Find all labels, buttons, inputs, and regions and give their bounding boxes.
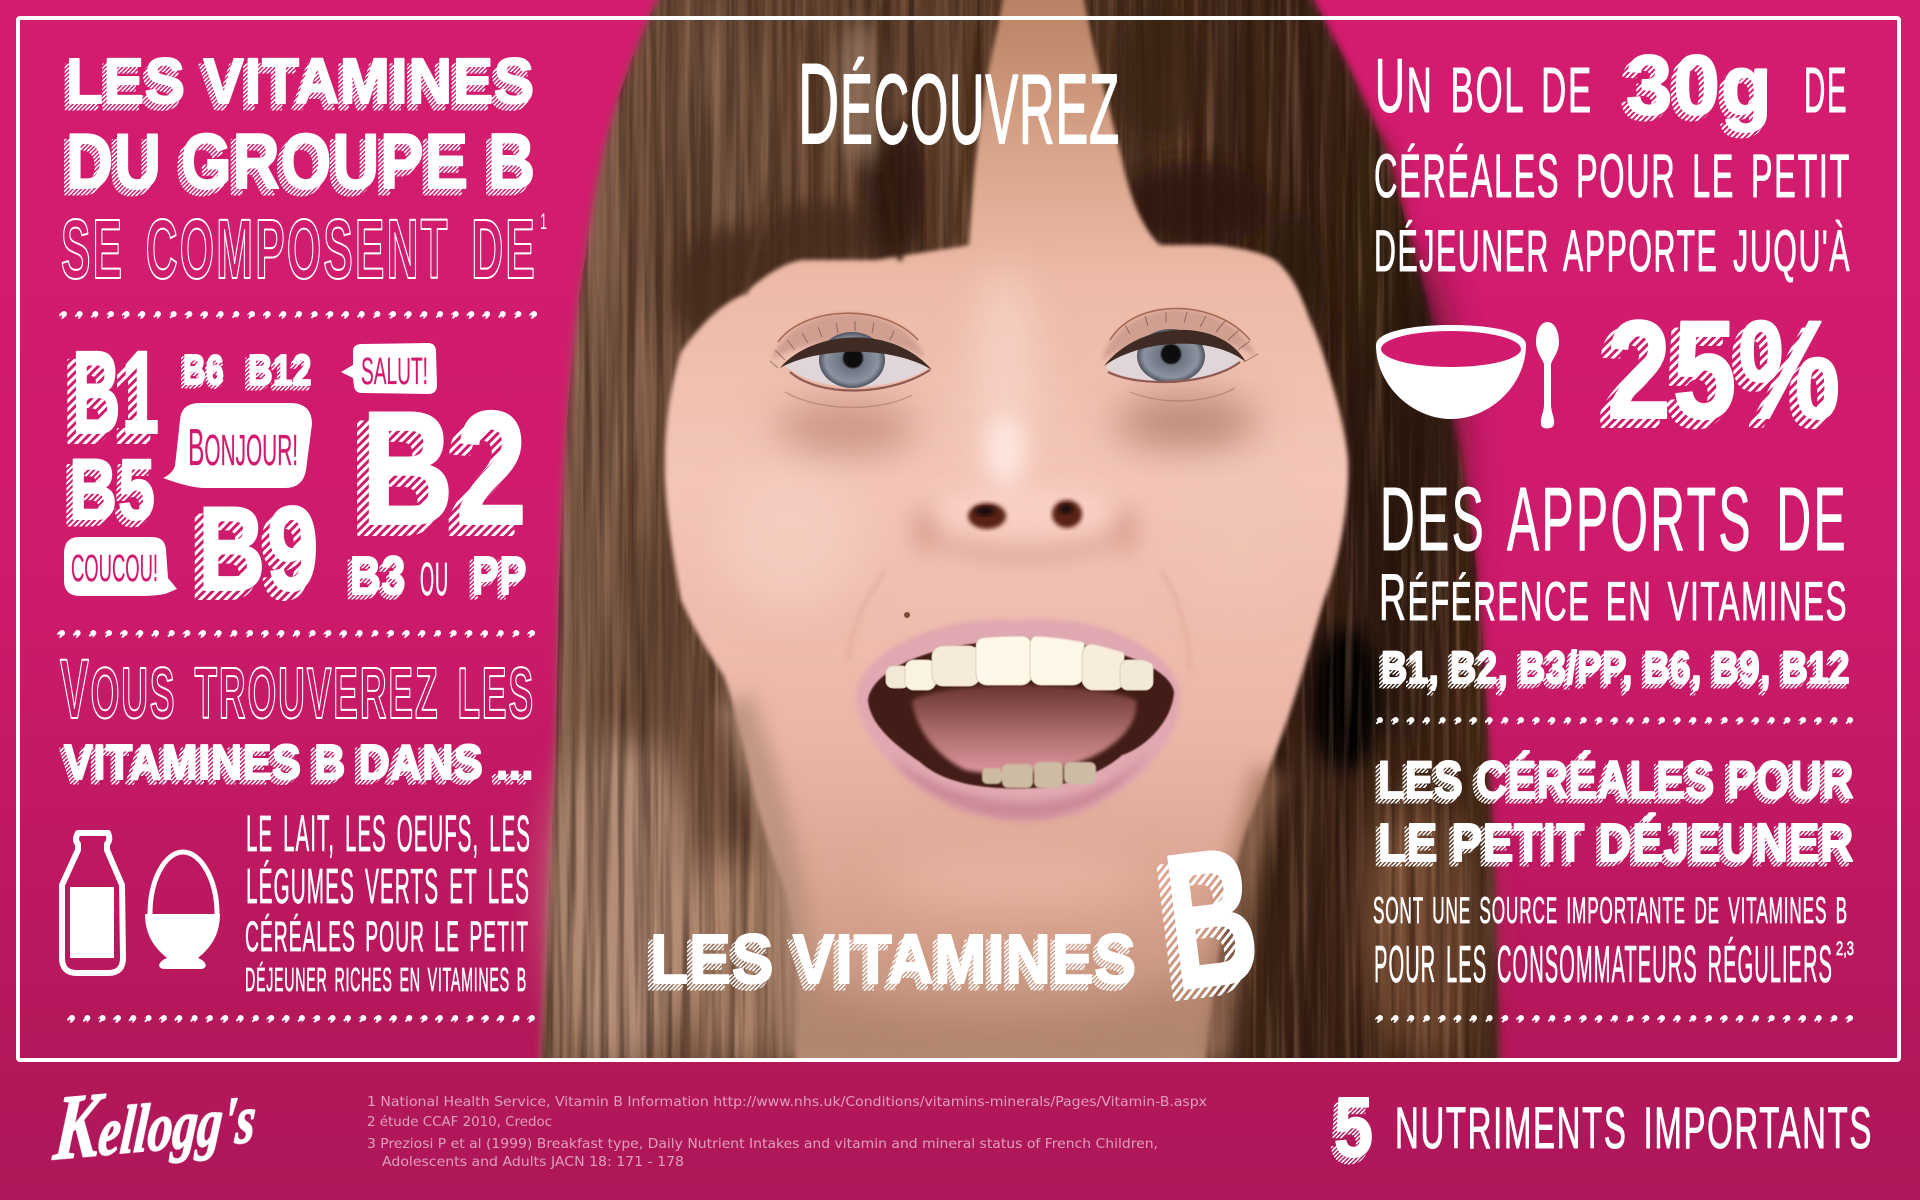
B12: B12 <box>244 350 310 399</box>
photo: smiling girl <box>540 0 1500 1070</box>
heading: vous trouverez les vitamines B dans <box>60 642 535 794</box>
B1: B1 <box>72 327 160 459</box>
hair highlights texture <box>540 0 1500 1070</box>
30g: 30g <box>1626 38 1773 132</box>
bangs shading <box>673 0 1327 352</box>
soft blend of neck into hair <box>735 700 1270 1060</box>
infographic: les vitamines B: DÉJEUNER RICHES EN VITAMINES B <box>245 961 527 998</box>
heading: les cereales pour le petit dejeuner <box>1374 750 1854 877</box>
tongue <box>912 685 1136 773</box>
mouth opening <box>868 640 1174 788</box>
lower lip shade <box>896 762 1140 823</box>
fringe strands <box>745 0 980 292</box>
bubble: salut <box>341 343 437 394</box>
footer: 5 nutriments importants <box>1330 1080 1873 1180</box>
references: Adolescents and Adults JACN 18: 171 - 178 <box>382 1155 684 1170</box>
number 5: 5 <box>1334 1080 1374 1174</box>
B1: B1 <box>64 336 152 468</box>
infographic: les vitamines B: LE LAIT, LES OEUFS, LES <box>246 805 531 862</box>
icon: spoon <box>1536 322 1559 428</box>
un bol de: UN BOL DE <box>1375 44 1593 129</box>
text: des apports de reference <box>1379 470 1848 634</box>
stat: 25%: 25% <box>1598 299 1836 456</box>
se composent de: SE COMPOSENT DE <box>61 202 537 296</box>
B6: B6 <box>180 349 224 396</box>
B2: B2 <box>361 378 529 559</box>
bubble: coucou <box>64 537 177 596</box>
stat: 25%: 25% <box>1607 291 1842 448</box>
B12: B12 <box>248 346 312 395</box>
bubble: salut: SALUT! <box>361 351 428 393</box>
heading: les vitamines B <box>645 805 1272 1042</box>
references <box>367 1095 1207 1170</box>
PP: PP <box>472 546 527 606</box>
hair strands texture <box>540 0 1500 1070</box>
les vitamines: LES VITAMINES <box>66 45 535 117</box>
references: 2 étude CCAF 2010, Credoc <box>367 1114 552 1130</box>
big B: B <box>1155 805 1270 1032</box>
infographic: les vitamines B: LÉGUMES VERTS ET LES <box>246 860 530 914</box>
heading: les vitamines du groupe B se composent de <box>61 45 547 296</box>
upper lip over teeth <box>938 634 1152 664</box>
infographic: les vitamines B: DE <box>1804 54 1848 126</box>
30g: 30g <box>1621 43 1769 137</box>
B3: B3 <box>350 546 406 606</box>
bubble: bonjour: BONJOUR! <box>188 419 298 477</box>
number 5: 5 <box>1330 1086 1370 1180</box>
icon: egg in cup <box>145 852 220 969</box>
smile lines <box>852 573 1186 640</box>
hair light areas <box>550 20 1480 1070</box>
dotted divider <box>60 633 533 634</box>
logo: kellogg's: Kellogg's <box>50 1059 261 1180</box>
vitamines B dans: VITAMINES B DANS ... <box>60 740 528 794</box>
footnote mark 1: 1 <box>540 209 547 234</box>
icon: milk bottle <box>62 833 123 973</box>
du groupe B: DU GROUPE B <box>61 123 531 211</box>
hair dark areas <box>616 130 1460 772</box>
B1 <box>64 327 160 468</box>
les vitamines: LES VITAMINES <box>645 926 1133 1004</box>
left eye <box>770 313 932 407</box>
dotted divider <box>62 314 535 316</box>
mole <box>904 612 910 618</box>
B9: B9 <box>198 482 320 616</box>
nose <box>911 416 1139 556</box>
heading: découvrez: DÉCOUVREZ <box>798 41 1120 168</box>
B6: B6 <box>183 346 224 393</box>
hair base <box>540 0 1500 1070</box>
lower teeth <box>982 762 1096 788</box>
text: foods with vitamin B <box>245 805 531 998</box>
lips <box>856 619 1180 820</box>
dotted divider <box>1378 720 1851 722</box>
vitamin names cluster <box>63 327 529 624</box>
icon: bowl <box>1376 325 1526 419</box>
references: 1 National Health Service, Vitamin B Information http://www.nhs.uk/Conditions/vitamins-minerals/Pages/Vitamin-B.aspx <box>367 1095 1207 1110</box>
footnote marks 2,3: 2,3 <box>1836 939 1854 960</box>
upper teeth <box>886 634 1153 690</box>
vitamines B dans: VITAMINES B DANS ... <box>64 736 534 790</box>
dotted divider <box>1378 1018 1851 1020</box>
PP: PP <box>468 550 524 610</box>
B3: B3 <box>346 550 404 610</box>
mouth <box>856 619 1180 820</box>
bubble: coucou: COUCOU! <box>71 548 158 590</box>
le petit dejeuner: LE PETIT DÉJEUNER <box>1374 817 1850 877</box>
big B: B <box>1145 816 1261 1042</box>
bubble: bonjour <box>163 403 312 488</box>
vous trouverez les: VOUS TROUVEREZ LES <box>60 642 535 736</box>
dotted divider <box>70 1018 533 1020</box>
skin shading: cheeks and under-eyes <box>736 274 1270 600</box>
B5: B5 <box>69 442 156 538</box>
references: 3 Preziosi P et al (1999) Breakfast type, Daily Nutrient Intakes and vitamin and mineral status of French Children, <box>367 1137 1158 1152</box>
face and neck skin <box>665 0 1348 1070</box>
B9: B9 <box>190 490 314 624</box>
B5: B5 <box>63 448 153 544</box>
les vitamines: LES VITAMINES <box>62 51 531 123</box>
vitamin names cluster: OU <box>420 553 449 605</box>
les vitamines: LES VITAMINES <box>650 920 1137 998</box>
neck shading under chin <box>800 850 1215 1070</box>
text: source of vitamin B <box>1373 890 1854 994</box>
du groupe B: DU GROUPE B <box>66 117 536 205</box>
infographic: les vitamines B: CÉRÉALES POUR LE PETIT <box>245 913 529 961</box>
text: un bol de 30g <box>1374 38 1851 284</box>
B2: B2 <box>350 388 520 569</box>
right eye <box>1102 308 1258 401</box>
